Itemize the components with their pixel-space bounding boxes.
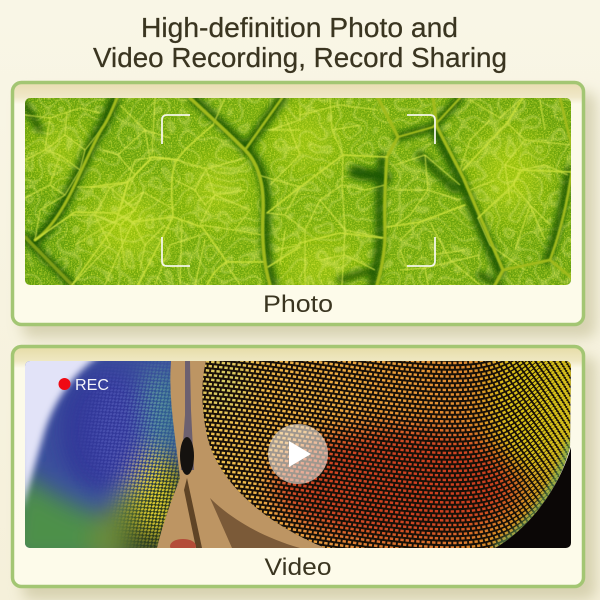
video: fly eye macro: [25, 361, 571, 548]
right eye: [202, 361, 571, 548]
dark shading along veins: [25, 98, 569, 285]
viewfinder corner brackets: [162, 115, 435, 266]
panel: video: [5, 330, 596, 600]
label: Video: Video: [264, 554, 332, 581]
light patches: [34, 112, 545, 287]
title: [93, 12, 507, 73]
title: High-definition Photo and: [141, 12, 458, 43]
label: Photo: Photo: [263, 291, 333, 318]
title: Video Recording, Record Sharing: [93, 42, 507, 73]
icon: play button: [268, 424, 328, 484]
REC indicator: REC: [75, 377, 109, 394]
panel: photo: [12, 82, 596, 338]
tertiary veins: [25, 98, 570, 285]
main veins: [25, 98, 572, 285]
REC indicator: [58, 377, 109, 394]
left eye facets: [90, 365, 181, 543]
tan head strip: [157, 361, 325, 548]
black background corner: [495, 447, 571, 548]
left eye colours: [25, 364, 180, 548]
fine vein net: [25, 98, 571, 285]
photo: leaf macro: [25, 98, 572, 287]
grain: [25, 98, 571, 285]
